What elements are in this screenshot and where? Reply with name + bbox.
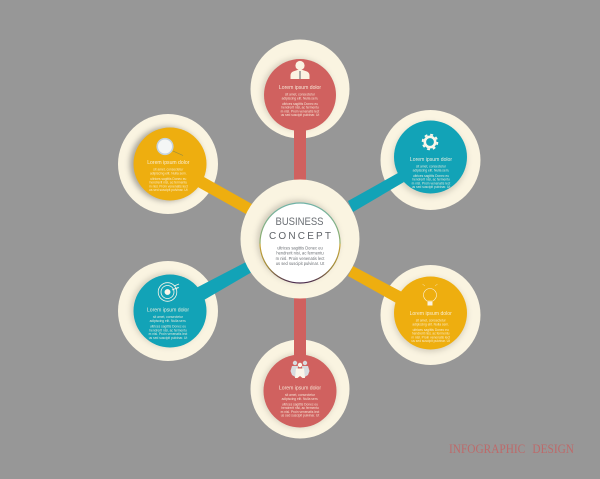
hub body text: hendrerit nisi, ac fermentu xyxy=(276,250,324,256)
disc xyxy=(134,274,206,348)
body text: us sed suscipit pulvinar. Ut xyxy=(412,185,450,189)
body text: ultrices sagittis Donec eu xyxy=(413,328,449,332)
heading: Lorem ipsum dolor xyxy=(279,386,321,392)
body text: ultrices sagittis Donec eu xyxy=(150,325,186,329)
footer label: INFOGRAPHIC DESIGN xyxy=(449,441,575,456)
icon: gear xyxy=(423,135,437,149)
connector: lower right xyxy=(348,266,404,304)
disc xyxy=(264,354,336,428)
outer ring xyxy=(380,265,480,365)
body text: m nisl. Proin venenatis lect xyxy=(411,335,450,339)
disc xyxy=(264,59,336,131)
hub body text: us sed suscipit pulvinar. Ut xyxy=(276,261,325,266)
body text: sit amet, consectetur xyxy=(416,318,447,322)
body text: ultrices sagittis Donec eu xyxy=(282,102,318,106)
body text: sit amet, consectetur xyxy=(416,164,447,168)
icon: light bulb xyxy=(422,284,438,306)
body text: hendrerit nisi, ac fermentu xyxy=(281,406,319,410)
outer ring xyxy=(380,110,480,210)
body text: adipiscing elit. Nulla sem. xyxy=(282,397,318,401)
outer ring xyxy=(118,114,218,214)
connector: lower left xyxy=(196,262,252,300)
body text: adipiscing elit. Nulla sem. xyxy=(282,96,318,100)
heading: Lorem ipsum dolor xyxy=(147,308,189,314)
heading: Lorem ipsum dolor xyxy=(410,157,452,163)
connector: bottom xyxy=(294,296,306,360)
connector: upper right xyxy=(348,173,404,212)
hub ring xyxy=(240,180,360,298)
outer ring xyxy=(250,340,350,438)
body text: sit amet, consectetur xyxy=(285,92,316,96)
body text: hendrerit nisi, ac fermentu xyxy=(281,106,319,110)
body text: adipiscing elit. Nulla sem. xyxy=(150,172,187,176)
heading: Lorem ipsum dolor xyxy=(279,85,321,91)
body text: hendrerit nisi, ac fermentu xyxy=(412,332,450,336)
icon: person xyxy=(290,61,310,79)
heading: Lorem ipsum dolor xyxy=(410,311,452,317)
disc xyxy=(394,276,467,350)
hub body text: m nisl. Proin venenatis lect xyxy=(276,256,325,261)
body text: sit amet, consectetur xyxy=(153,168,184,172)
icon: people xyxy=(290,361,310,378)
hub disc xyxy=(260,203,340,283)
icon: target xyxy=(158,283,179,301)
hub body text: ultrices sagittis Donec eu xyxy=(277,246,323,250)
body text: ultrices sagittis Donec eu xyxy=(150,177,187,181)
body text: us sed suscipit pulvinar. Ut xyxy=(281,414,319,418)
body text: hendrerit nisi, ac fermentu xyxy=(412,178,450,182)
node: top xyxy=(250,40,350,182)
body text: hendrerit nisi, ac fermentu xyxy=(150,181,187,185)
node: upper right xyxy=(348,110,480,212)
body text: adipiscing elit. Nulla sem. xyxy=(412,322,449,326)
connector: top xyxy=(294,120,306,182)
body text: m nisl. Proin venenatis lect xyxy=(281,109,319,113)
icon: magnifier xyxy=(157,139,183,156)
center hub xyxy=(240,180,360,298)
hub title: BUSINESS xyxy=(276,216,324,228)
body text: m nisl. Proin venenatis lect xyxy=(149,184,188,188)
node: lower left xyxy=(118,261,252,361)
body text: m nisl. Proin venenatis lect xyxy=(281,410,319,414)
disc xyxy=(134,128,206,200)
body text: m nisl. Proin venenatis lect xyxy=(412,181,450,185)
heading: Lorem ipsum dolor xyxy=(147,160,190,166)
node: bottom xyxy=(250,296,350,438)
outer ring xyxy=(250,40,350,138)
body text: m nisl. Proin venenatis lect xyxy=(149,332,187,336)
body text: sit amet, consectetur xyxy=(285,393,316,397)
body text: ultrices sagittis Donec eu xyxy=(282,402,318,406)
node: upper left xyxy=(118,114,252,214)
hub subtitle: CONCEPT xyxy=(269,231,331,242)
body text: adipiscing elit. Nulla sem. xyxy=(150,319,186,323)
body text: us sed suscipit pulvinar. Ut xyxy=(281,113,319,117)
body text: sit amet, consectetur xyxy=(153,315,184,319)
body text: us sed suscipit pulvinar. Ut xyxy=(149,188,188,192)
body text: adipiscing elit. Nulla sem. xyxy=(413,168,449,172)
body text: us sed suscipit pulvinar. Ut xyxy=(149,336,187,340)
connector: upper left xyxy=(196,177,252,214)
body text: ultrices sagittis Donec eu xyxy=(413,174,449,178)
outer ring xyxy=(118,261,218,361)
body text: us sed suscipit pulvinar. Ut xyxy=(411,339,450,343)
body text: hendrerit nisi, ac fermentu xyxy=(149,328,187,332)
disc xyxy=(394,120,467,194)
node: lower right xyxy=(348,265,480,365)
